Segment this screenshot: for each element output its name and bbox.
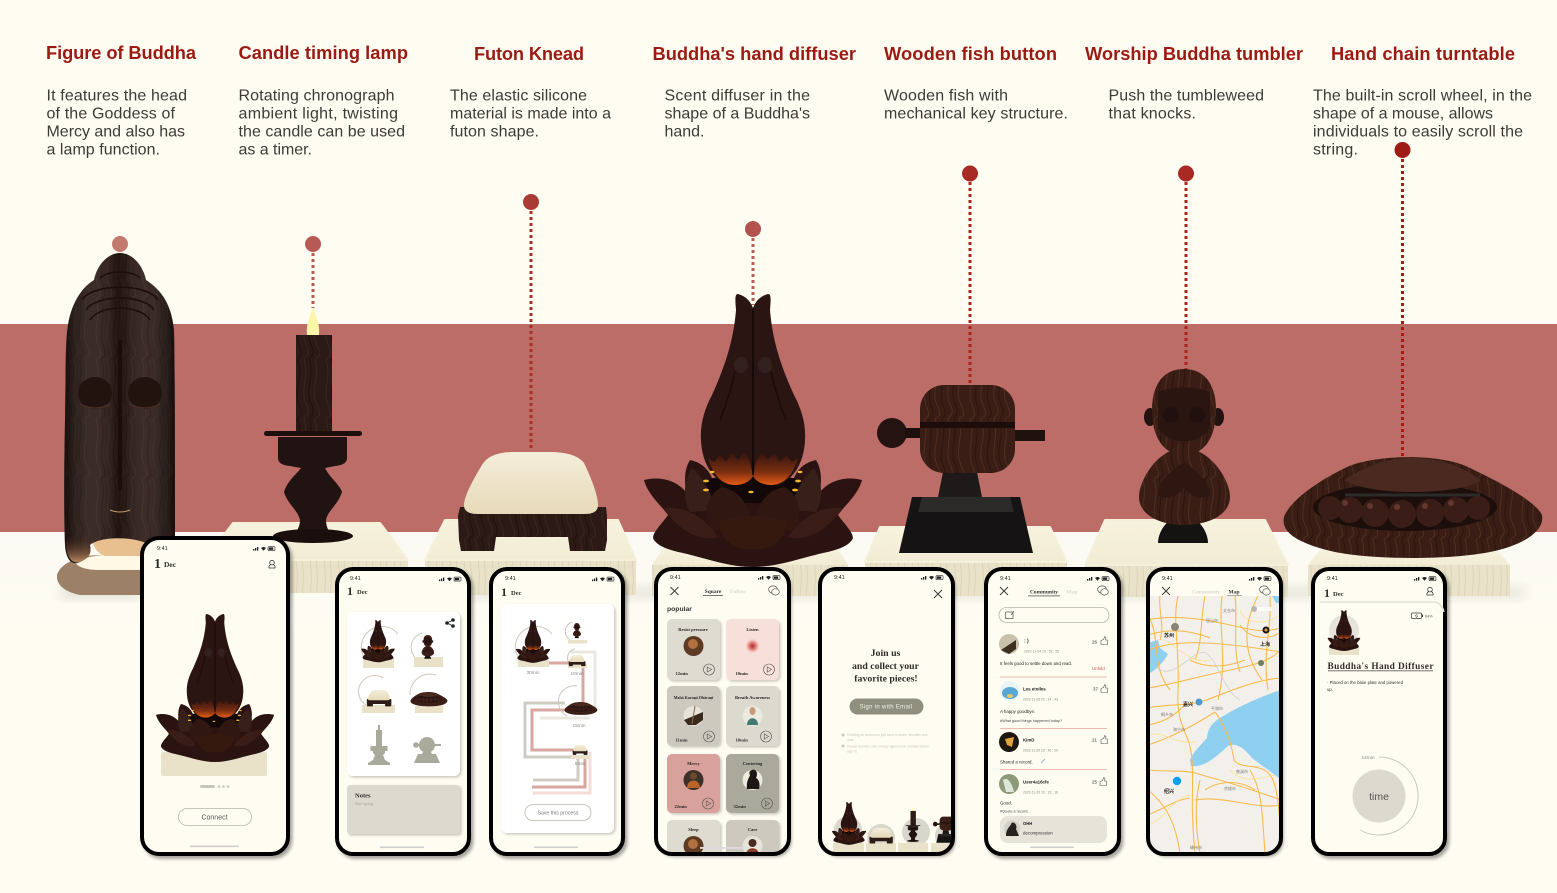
silhouette: fish <box>413 737 441 763</box>
icon: user <box>269 560 275 568</box>
diffuser render <box>156 614 274 762</box>
place labels: 平湖市 <box>1211 705 1223 711</box>
description: Buddha's hand diffuser <box>664 88 810 140</box>
phone 7: map screen <box>1148 569 1281 854</box>
description: Wooden fish button: Wooden fish with <box>884 88 1008 104</box>
date <box>154 557 177 572</box>
status bar <box>670 575 780 581</box>
description: Futon Knead <box>450 88 611 140</box>
privacy notes: sign in. <box>847 750 858 754</box>
tabs <box>1028 590 1078 596</box>
status and date: Dec <box>511 590 522 597</box>
tabs: Community <box>1030 590 1058 596</box>
mini diffuser <box>361 620 398 668</box>
map avatars <box>1171 606 1272 706</box>
quoted record: OHH <box>1023 821 1032 826</box>
post 1 <box>999 634 1108 678</box>
status bar: 9:41 <box>834 575 845 581</box>
status bar: 9:41 <box>1162 576 1173 582</box>
quoted record: decompression <box>1023 830 1053 836</box>
description: Hand chain turntable: string. <box>1313 142 1358 158</box>
status bar <box>1162 576 1271 582</box>
floor <box>0 532 1557 632</box>
sign-in heading <box>852 648 920 684</box>
post 4 <box>999 774 1106 814</box>
phone 8: timer screen <box>1313 569 1445 854</box>
status and date: 9:41 <box>1327 576 1338 582</box>
post 4: #Quote a record. <box>1000 810 1028 814</box>
water <box>1148 596 1281 780</box>
post 2: Les etoiles <box>1023 686 1046 692</box>
tile: Listen: 10min <box>736 671 748 676</box>
place labels <box>1161 607 1270 850</box>
line-up fish <box>932 816 951 843</box>
description: Hand chain turntable <box>1313 88 1532 158</box>
line-up diffuser <box>832 802 866 845</box>
status and date: 1 <box>1324 586 1330 600</box>
description: Figure of Buddha: Mercy and also has <box>46 124 185 140</box>
red horizontal band <box>0 324 1557 532</box>
description: Worship Buddha tumbler: that knocks. <box>1108 106 1196 122</box>
tabs <box>703 589 746 596</box>
composer <box>999 608 1109 622</box>
save button <box>525 804 591 820</box>
heading: Buddha's hand diffuser: Buddha's hand diffuser <box>652 43 856 64</box>
notes panel: Start typing <box>355 802 373 806</box>
tile: Mahā Karuṇā Dhāraṇī <box>667 686 720 746</box>
description: Candle timing lamp: Rotating chronograph <box>238 88 394 104</box>
post 3 <box>999 732 1108 770</box>
tile: Mahā Karuṇā Dhāraṇī: Mahā Karuṇā Dhāraṇī <box>674 695 714 700</box>
tile: Centering: 32min <box>734 804 746 809</box>
phone 3: process screen <box>491 569 623 854</box>
description: Figure of Buddha: a lamp function. <box>46 142 160 158</box>
description: Wooden fish button: mechanical key structure. <box>884 106 1068 122</box>
base plate: wooden fish <box>865 527 1067 596</box>
privacy notes: Creating an account is just used to share, favorites and <box>847 733 928 737</box>
place labels: 太仓市 <box>1223 607 1235 613</box>
status and date: Dec <box>357 589 368 596</box>
description: Figure of Buddha: of the Goddess of <box>46 106 176 122</box>
leader: Candle timing lamp <box>305 236 321 308</box>
notes panel: Notes <box>355 792 371 800</box>
phone 1: connect screen <box>142 538 288 854</box>
post 2: 2022-11-03 02 : 14 : 43 <box>1023 698 1058 702</box>
post 4: Good. <box>1000 800 1012 806</box>
description: Futon Knead: futon shape. <box>450 124 539 140</box>
post 1: 26 <box>1092 640 1097 644</box>
privacy notes <box>842 733 929 754</box>
place labels: 余姚市 <box>1224 785 1236 791</box>
step: diffuser 30min: 30min <box>526 670 540 676</box>
step: tumbler <box>565 622 587 644</box>
mini turntable <box>410 674 447 713</box>
status and date: 9:41 <box>505 576 516 582</box>
tile: Sleep: Sleep <box>688 827 699 832</box>
section title: popular <box>667 606 692 613</box>
road network <box>1148 596 1281 854</box>
save button: Save this process <box>538 810 579 816</box>
post 2: 37 <box>1093 686 1098 692</box>
tile: Care: Care <box>748 827 757 832</box>
description: Worship Buddha tumbler: Push the tumbleweed <box>1108 88 1264 104</box>
instruction text: up. <box>1327 687 1333 692</box>
map <box>1148 596 1281 854</box>
plates <box>833 843 950 852</box>
post 3: 2022-11-20 23 : 46 : 20 <box>1023 748 1058 752</box>
post 1: It feels good to settle down and read. <box>1000 661 1072 666</box>
description: Futon Knead: material is made into a <box>450 106 611 122</box>
icon: share <box>446 619 454 627</box>
leader: Worship Buddha tumbler <box>1178 166 1194 369</box>
date: Dec <box>164 560 177 569</box>
tile: Listen: Listen <box>746 627 759 632</box>
product: Buddha's hand diffuser <box>644 294 862 567</box>
heading: Hand chain turntable: Hand chain turntable <box>1331 43 1515 64</box>
post 1: 2022-11-04 10 : 52 : 55 <box>1024 650 1059 654</box>
icon: close <box>1000 587 1008 595</box>
status and date: 9:41 <box>350 576 361 582</box>
instruction text <box>1327 680 1404 692</box>
description: Hand chain turntable: shape of a mouse, allows <box>1313 106 1493 122</box>
place labels: 绍兴 <box>1164 788 1174 795</box>
step: futon 5min <box>571 745 590 767</box>
base plate: candle <box>205 523 408 593</box>
mini futon <box>359 676 395 713</box>
description: Figure of Buddha: It features the head <box>46 88 187 104</box>
step: diffuser 30min <box>515 620 552 676</box>
base plate: diffuser <box>652 545 848 596</box>
sign-in heading: favorite pieces! <box>854 674 918 684</box>
post 4: 25 <box>1092 780 1097 784</box>
description: Wooden fish button <box>884 88 1068 122</box>
status bar <box>834 575 943 581</box>
panel edge <box>1320 602 1444 612</box>
tile: Care <box>726 820 782 852</box>
leader: Wooden fish button <box>962 166 978 385</box>
post 2 <box>1000 681 1108 729</box>
line-up futon <box>869 828 893 844</box>
sign-in button <box>850 698 924 714</box>
leader: Futon Knead <box>523 194 539 451</box>
status and date <box>501 576 614 599</box>
battery level <box>1412 613 1433 618</box>
post 1: : ) <box>1024 638 1029 644</box>
description: Figure of Buddha <box>46 88 187 158</box>
tile: Mercy <box>667 754 720 813</box>
heading: Figure of Buddha: Figure of Buddha <box>46 42 197 63</box>
tabs: Map <box>1066 590 1078 596</box>
product: Figure of Buddha <box>57 253 175 595</box>
status bar <box>157 546 275 552</box>
step: futon 5min: 5min <box>575 761 586 767</box>
description: Hand chain turntable: The built-in scroll wheel, in the <box>1313 88 1532 104</box>
leader: Hand chain turntable <box>1394 142 1410 456</box>
status and date: Dec <box>1333 591 1344 598</box>
sign-in button: Sign in with Email <box>860 704 912 710</box>
status bar: 9:41 <box>157 546 168 552</box>
status and date: 1 <box>347 584 353 598</box>
icon: user <box>1427 587 1433 595</box>
step: futon 10min <box>568 649 587 677</box>
sign-in heading: and collect your <box>852 661 920 672</box>
description: Buddha's hand diffuser: Scent diffuser in the <box>664 88 810 104</box>
base plate <box>161 752 267 776</box>
status bar: 9:41 <box>1000 576 1011 582</box>
heading: Wooden fish button: Wooden fish button <box>884 43 1057 64</box>
timer <box>1352 755 1418 835</box>
status and date: 1 <box>501 585 507 599</box>
description: Futon Knead: The elastic silicone <box>450 88 587 104</box>
heading: Candle timing lamp: Candle timing lamp <box>238 42 408 63</box>
description: Candle timing lamp: as a timer. <box>238 142 312 158</box>
icon: chat <box>1260 586 1270 595</box>
product: futon knead <box>458 452 607 551</box>
product thumbnail <box>1328 610 1360 655</box>
pager dots <box>200 785 229 788</box>
battery level: 64% <box>1425 614 1433 618</box>
tabs <box>1192 590 1242 596</box>
sign-in heading: Join us <box>871 648 901 659</box>
product: candle timing lamp <box>264 308 362 543</box>
icon: close <box>670 587 678 595</box>
description: Candle timing lamp: ambient light, twisting <box>238 106 398 122</box>
tabs: Follow <box>730 589 746 595</box>
step: turntable 15min <box>558 686 597 729</box>
silhouette: candle <box>368 725 390 765</box>
place labels: 嵊州市 <box>1190 844 1202 850</box>
icon: chat <box>769 586 779 595</box>
phone 6: community screen <box>986 569 1119 854</box>
instruction text: · Placed on the base plate and powered <box>1327 680 1404 685</box>
tile: Resist pressure: Resist pressure <box>678 627 708 632</box>
icon: chat <box>1098 586 1108 595</box>
status bar: 9:41 <box>670 575 681 581</box>
post 3: KimD <box>1023 738 1034 742</box>
tabs: Community <box>1192 590 1220 596</box>
timer: time <box>1369 791 1389 803</box>
leader: Figure of Buddha <box>112 236 128 252</box>
place labels: 苏州 <box>1164 632 1174 639</box>
post 4: 2022-11-20 19 : 23 : 16 <box>1023 790 1058 794</box>
connect button: Connect <box>201 814 228 822</box>
step: futon 10min: 10min <box>570 671 584 677</box>
product: wooden fish button <box>877 385 1045 553</box>
product title: Buddha's Hand Diffuser <box>1328 662 1434 672</box>
connect button <box>178 808 252 826</box>
floor shadows <box>60 585 1525 599</box>
status bar <box>1000 576 1109 582</box>
tile: Breath Awareness: 10min <box>736 738 748 742</box>
phone 5: sign-in screen <box>820 569 963 854</box>
icon: close <box>934 590 942 598</box>
tile: Listen <box>726 619 779 680</box>
description: Buddha's hand diffuser: hand. <box>664 124 704 140</box>
quoted record <box>1000 816 1107 843</box>
process card <box>502 604 614 833</box>
post 1: Unfold <box>1092 666 1105 671</box>
tile: Breath Awareness <box>726 686 779 746</box>
post 3: 21 <box>1092 738 1097 742</box>
product line-up <box>832 802 951 852</box>
place labels: 桐乡市 <box>1161 711 1173 717</box>
location marker <box>1173 777 1181 785</box>
product: hand chain turntable <box>1284 457 1542 558</box>
tile: Resist pressure: 12min <box>676 671 688 676</box>
tabs: Map <box>1228 590 1240 596</box>
tile: Centering <box>726 754 779 813</box>
description: Buddha's hand diffuser: shape of a Buddha's <box>664 106 810 122</box>
description: Candle timing lamp: the candle can be used <box>238 124 405 140</box>
privacy notes: chat. <box>847 738 854 742</box>
tile: Sleep <box>667 820 723 852</box>
phone 2: collection screen <box>337 569 469 854</box>
step: turntable 15min: 15min <box>572 723 586 729</box>
base plate: tumbler <box>1085 520 1288 597</box>
post 2: A happy goodbye. <box>1000 709 1035 714</box>
place labels: 海宁市 <box>1173 726 1185 732</box>
post 2: #What good things happened today? <box>1000 719 1062 723</box>
tile: Centering: Centering <box>743 761 763 766</box>
icon: close <box>1162 587 1170 595</box>
notes panel <box>347 785 460 834</box>
phone 4: square screen <box>656 569 789 870</box>
product: worship Buddha tumbler <box>1139 369 1230 543</box>
tile: Mahā Karuṇā Dhāraṇī: 11min <box>676 738 688 742</box>
place labels: 嘉兴 <box>1183 701 1193 708</box>
tile: Mercy: 22min <box>674 804 687 809</box>
tile: Mercy: Mercy <box>687 761 701 766</box>
base plate: turntable <box>1308 550 1510 596</box>
post 4: User4a16cfe <box>1023 780 1049 784</box>
heading: Futon Knead: Futon Knead <box>474 43 584 64</box>
tabs: Square <box>705 589 722 595</box>
line-up candle <box>906 807 920 842</box>
place labels: 上海 <box>1260 641 1270 648</box>
date: 1 <box>154 557 161 572</box>
place labels: 慈溪市 <box>1236 768 1248 774</box>
description: Worship Buddha tumbler <box>1108 88 1264 122</box>
leader: Buddha's hand diffuser <box>745 221 761 305</box>
collection card <box>347 612 460 776</box>
privacy notes: Please read the user privacy agreement carefully before <box>847 744 929 748</box>
tile: Breath Awareness: Breath Awareness <box>735 695 770 700</box>
status and date <box>347 576 461 598</box>
tile: Resist pressure <box>667 619 720 680</box>
description: Hand chain turntable: individuals to easily scroll the <box>1313 124 1523 140</box>
post 3: Shared a record. <box>1000 760 1033 764</box>
circle backdrops <box>834 817 951 843</box>
timer: 14min <box>1361 755 1375 761</box>
base plate: futon <box>425 520 636 595</box>
process paths <box>525 652 595 793</box>
tile grid <box>667 619 779 870</box>
mini tumbler <box>411 633 443 667</box>
heading: Worship Buddha tumbler: Worship Buddha tumbler <box>1085 43 1303 64</box>
status and date <box>1324 576 1436 600</box>
description: Candle timing lamp <box>238 88 405 158</box>
place labels: 昆山市 <box>1206 617 1218 623</box>
